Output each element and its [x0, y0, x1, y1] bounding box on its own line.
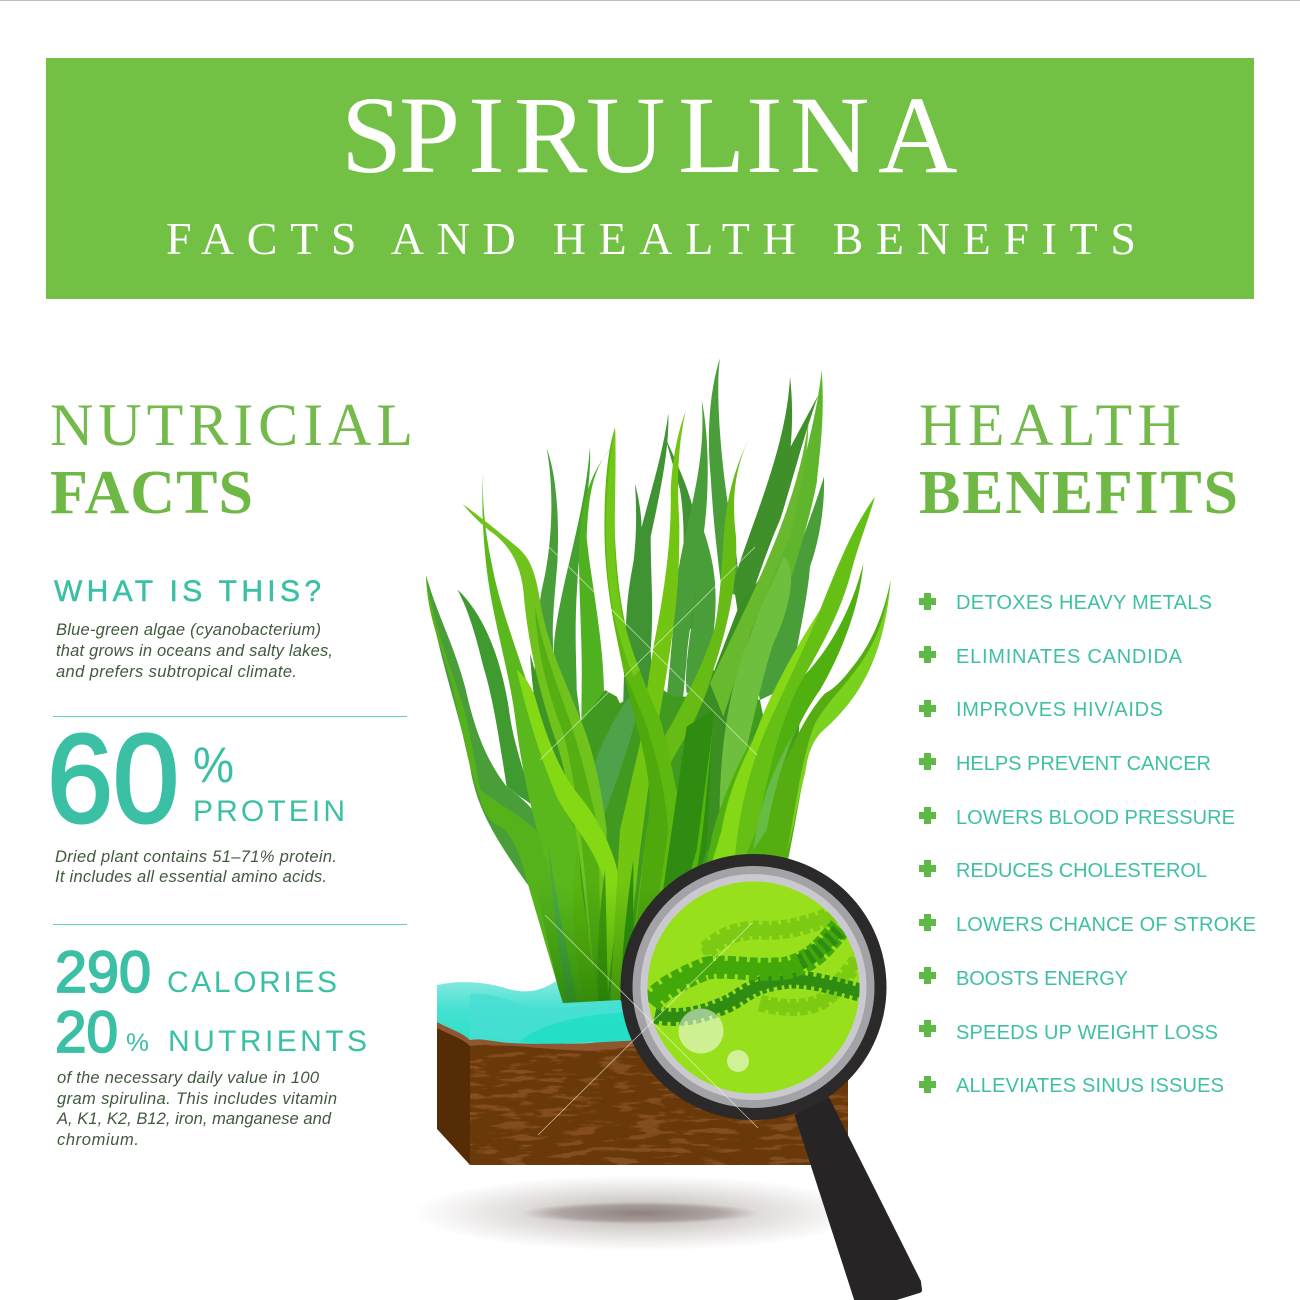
magnifier handle [798, 1100, 919, 1300]
heading: health benefits [919, 392, 1238, 527]
panel: what is this: and prefers subtropical climate. [56, 663, 297, 681]
stat: 60% protein: Dried plant contains 51–71% protein. [55, 848, 337, 866]
list: health benefits: ALLEVIATES SINUS ISSUES [956, 1075, 1224, 1097]
spirulina filaments [650, 912, 862, 1017]
list: health benefits: SPEEDS UP WEIGHT LOSS [956, 1022, 1218, 1044]
stat: calories and nutrients: % [126, 1029, 149, 1057]
heading: nutricial facts [50, 392, 413, 527]
panel: what is this [54, 575, 333, 681]
magnifying lens [620, 854, 886, 1120]
soil block [437, 1022, 848, 1166]
water [437, 981, 645, 1044]
stat: calories and nutrients: CALORIES [167, 966, 337, 999]
grass lower mass [535, 670, 800, 1004]
panel: what is this: WHAT IS THIS? [54, 575, 321, 608]
lens highlights [678, 1008, 749, 1072]
stat: calories and nutrients: of the necessary daily value in 100 [57, 1069, 320, 1087]
list: health benefits: ELIMINATES CANDIDA [956, 646, 1183, 668]
list: health benefits: IMPROVES HIV/AIDS [956, 699, 1163, 721]
top edge line [0, 0, 1300, 1]
panel: what is this: that grows in oceans and salty lakes, [56, 642, 333, 660]
stat: 60% protein: % [193, 737, 234, 793]
stat: 60% protein [47, 710, 345, 886]
panel: what is this: Blue-green algae (cyanobacterium) [56, 621, 321, 639]
stat: calories and nutrients: A, K1, K2, B12, iron, manganese and [56, 1110, 332, 1128]
stat: calories and nutrients: 290 [55, 940, 151, 1005]
stat: calories and nutrients: 20 [55, 1000, 118, 1065]
stat: 60% protein: It includes all essential amino acids. [55, 868, 327, 886]
list: health benefits: DETOXES HEAVY METALS [956, 592, 1212, 614]
list: health benefits [919, 592, 1256, 1097]
stat: calories and nutrients: gram spirulina. This includes vitamin [57, 1090, 337, 1108]
list: health benefits: LOWERS CHANCE OF STROKE [956, 914, 1256, 936]
list: health benefits: LOWERS BLOOD PRESSURE [956, 807, 1235, 829]
list: health benefits: REDUCES CHOLESTEROL [956, 860, 1207, 882]
heading: nutricial facts: NUTRICIAL [50, 392, 413, 458]
stat: calories and nutrients [55, 940, 367, 1149]
ground shadow [412, 1175, 868, 1251]
title banner: SPIRULINA [341, 74, 957, 196]
stat: 60% protein: 60 [47, 710, 179, 849]
watermark hairlines [538, 545, 758, 1135]
stat: calories and nutrients: chromium. [57, 1131, 139, 1149]
stat: calories and nutrients: NUTRIENTS [168, 1025, 367, 1058]
title banner [46, 58, 1254, 299]
plant: spirulina grass [426, 358, 891, 1004]
stat: 60% protein: PROTEIN [193, 795, 345, 828]
heading: health benefits: BENEFITS [919, 459, 1238, 527]
heading: health benefits: HEALTH [919, 392, 1181, 458]
title banner: FACTS AND HEALTH BENEFITS [166, 213, 1136, 264]
list: health benefits: BOOSTS ENERGY [956, 968, 1128, 990]
heading: nutricial facts: FACTS [50, 459, 253, 527]
list: health benefits: HELPS PREVENT CANCER [956, 753, 1211, 775]
